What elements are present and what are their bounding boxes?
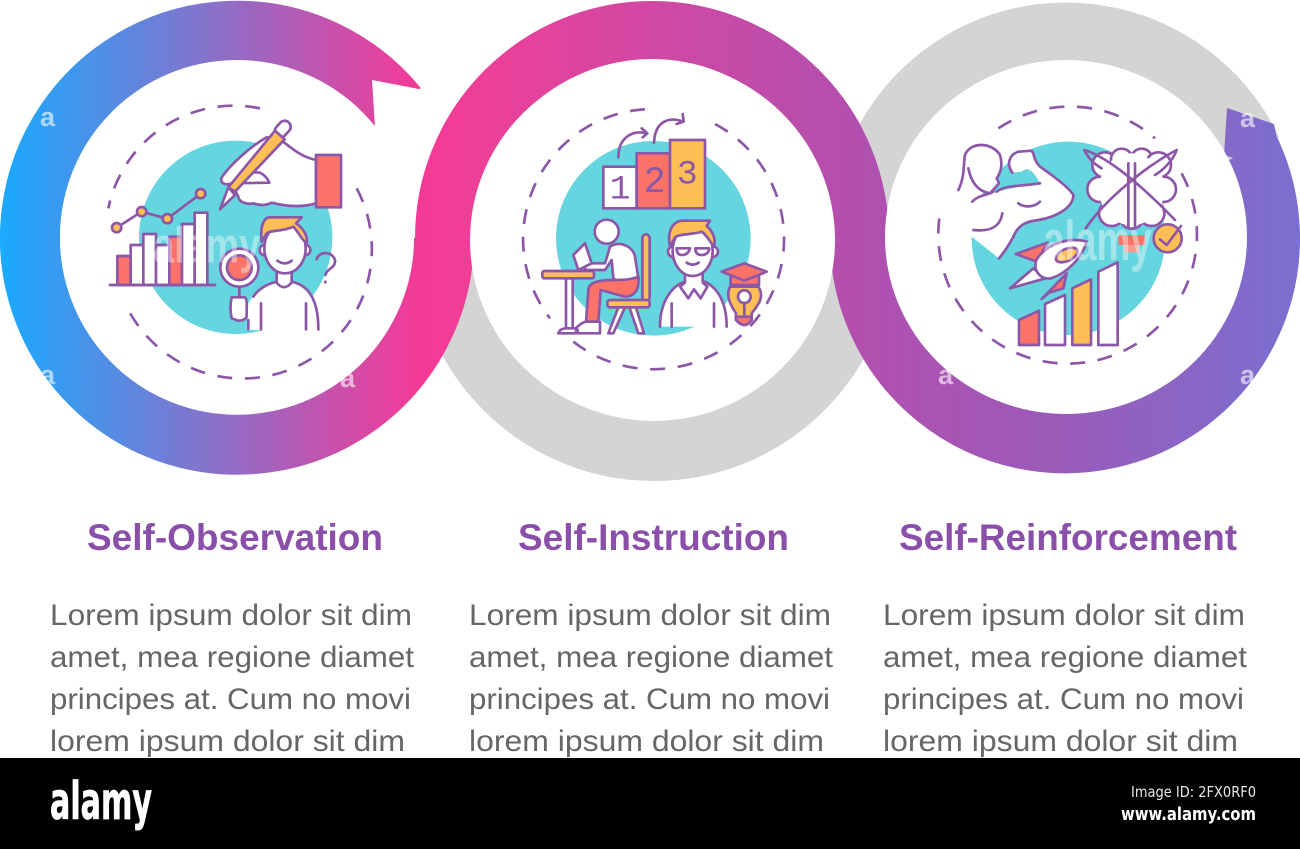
text block: column 3: Lorem ipsum dolor sit dim [883,599,1245,632]
dashed ring [108,106,372,379]
gradient ribbon with arrowheads [30,30,1285,445]
person with magnifier [220,217,335,330]
icon background circle [139,141,332,334]
text block: column 1: Lorem ipsum dolor sit dim [50,599,412,632]
white inner circle: right [885,60,1247,414]
teacher with glasses [660,221,727,327]
icon background circle [972,142,1165,335]
website: www.alamy.com [1121,804,1256,825]
watermark marks on ribbon: a [340,363,356,393]
icon: self-instruction [523,109,784,369]
watermark marks on ribbon [40,102,1256,393]
text block: column 1 [50,599,415,758]
white inner circle: middle [470,60,835,420]
watermark marks on ribbon: a [40,102,56,132]
muscular figure [958,145,1073,258]
text block: column 3: lorem ipsum dolor sit dim [883,725,1238,758]
brain with crossing rays [1084,149,1182,252]
bar chart [110,189,215,285]
watermark: alamy [1043,210,1152,273]
rocket [1010,240,1087,299]
heading: Self-Observation: Self-Observation [87,517,383,558]
gray ring: middle step lower half [443,240,865,451]
text block: column 3: amet, mea regione diamet [883,641,1248,674]
gray ring: right step upper half [860,33,1252,237]
text block: column 1: principes at. Cum no movi [50,683,411,716]
footer bar [0,758,1300,849]
watermark marks on ribbon: a [1240,360,1256,390]
growth bars [1019,262,1118,345]
text block: column 2 [469,599,834,758]
heading: Self-Reinforcement: Self-Reinforcement [899,517,1237,558]
arrows above podium [618,114,684,157]
text block: column 2: Lorem ipsum dolor sit dim [469,599,831,632]
arrow notch: left ribbon end [372,80,440,127]
watermark marks on ribbon: a [1240,103,1256,133]
text block: column 1: amet, mea regione diamet [50,641,415,674]
podium with numbers: 1 [610,171,630,210]
image id: Image ID: 2FX0RF0 [1131,783,1256,801]
watermark marks on ribbon: a [40,360,56,390]
white inner circle: left [60,60,414,414]
text block: column 2: lorem ipsum dolor sit dim [469,725,824,758]
icon: self-reinforcement [938,107,1197,364]
text block: column 3 [883,599,1248,758]
text block: column 2: amet, mea regione diamet [469,641,834,674]
watermark marks on ribbon: a [938,360,954,390]
icon: self-observation [108,106,372,379]
podium with numbers [603,140,705,210]
hand writing with pencil [220,118,341,209]
dashed ring [523,109,784,369]
watermark: alamy [153,218,260,274]
podium with numbers: 3 [677,155,698,194]
text block: column 3: principes at. Cum no movi [883,683,1244,716]
heading: Self-Instruction: Self-Instruction [518,517,789,558]
icon background circle [556,141,751,336]
graduation bulb [722,263,767,325]
footer logo: alamy [50,772,152,832]
student at desk [542,220,650,333]
text block: column 2: principes at. Cum no movi [469,683,830,716]
podium with numbers: 2 [644,162,666,204]
dashed ring [938,107,1197,364]
text block: column 1: lorem ipsum dolor sit dim [50,725,405,758]
